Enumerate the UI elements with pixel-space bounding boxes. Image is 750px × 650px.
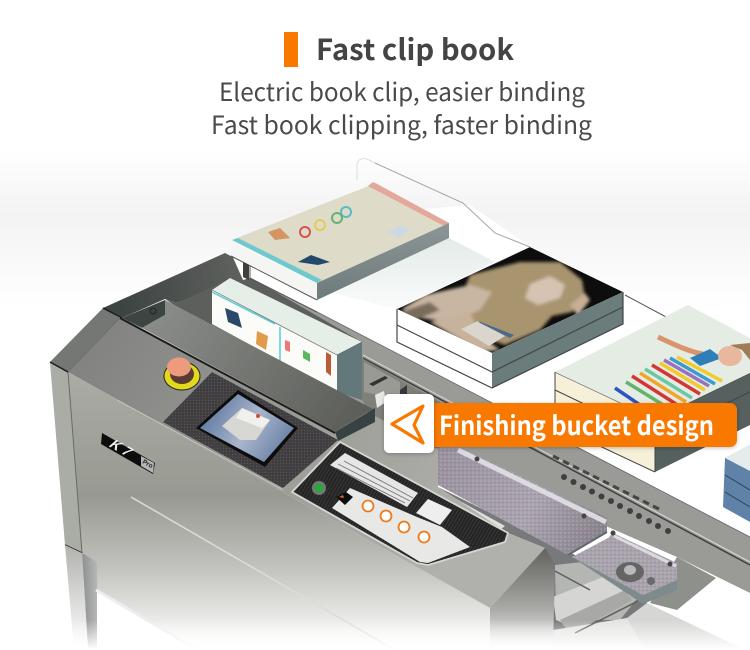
callout label bar <box>430 403 737 447</box>
front face crease <box>131 497 395 650</box>
under-table support and floor <box>650 557 750 650</box>
callout icon box <box>384 394 434 453</box>
table top with back guide <box>250 159 750 537</box>
callout: finishing bucket design <box>384 394 737 453</box>
background band <box>0 150 750 305</box>
book stack 4 <box>555 305 750 472</box>
book stack 3 <box>397 247 623 388</box>
side rail with holes <box>242 277 750 593</box>
machine left strip and leg <box>50 308 200 650</box>
emergency stop button <box>164 358 200 390</box>
right face of machine <box>490 548 555 650</box>
perforated finishing bucket plate <box>436 446 677 604</box>
machine illustration <box>50 159 750 650</box>
heading: accent bar and title: Fast clip book <box>316 27 514 69</box>
icon: arrow pointer <box>392 406 423 443</box>
hopper wall <box>120 300 375 441</box>
machine rear wall <box>103 253 242 318</box>
model badge: K 7 <box>105 438 136 459</box>
book stack 5 <box>723 445 750 522</box>
book stack 1 <box>231 182 449 312</box>
callout text: Finishing bucket design <box>439 406 714 443</box>
machine left chamfer <box>50 308 120 372</box>
subtitle text: Electric book clip, easier binding <box>219 73 585 109</box>
subtitle text <box>211 73 592 142</box>
carbon display panel <box>163 372 338 488</box>
photo cover: woman <box>397 247 623 353</box>
bottom fade <box>0 620 750 650</box>
control label panel <box>292 442 508 565</box>
tray floor behind hopper <box>165 273 362 400</box>
channel interior parts <box>362 358 440 450</box>
subtitle text: Fast book clipping, faster binding <box>211 106 592 142</box>
book stack 2 <box>212 278 362 400</box>
clamp mechanism <box>438 487 745 650</box>
machine front face <box>68 372 490 650</box>
model badge: Pro <box>141 459 154 470</box>
model badge <box>101 433 155 474</box>
machine top surface <box>68 318 545 608</box>
touch screen <box>196 390 298 467</box>
